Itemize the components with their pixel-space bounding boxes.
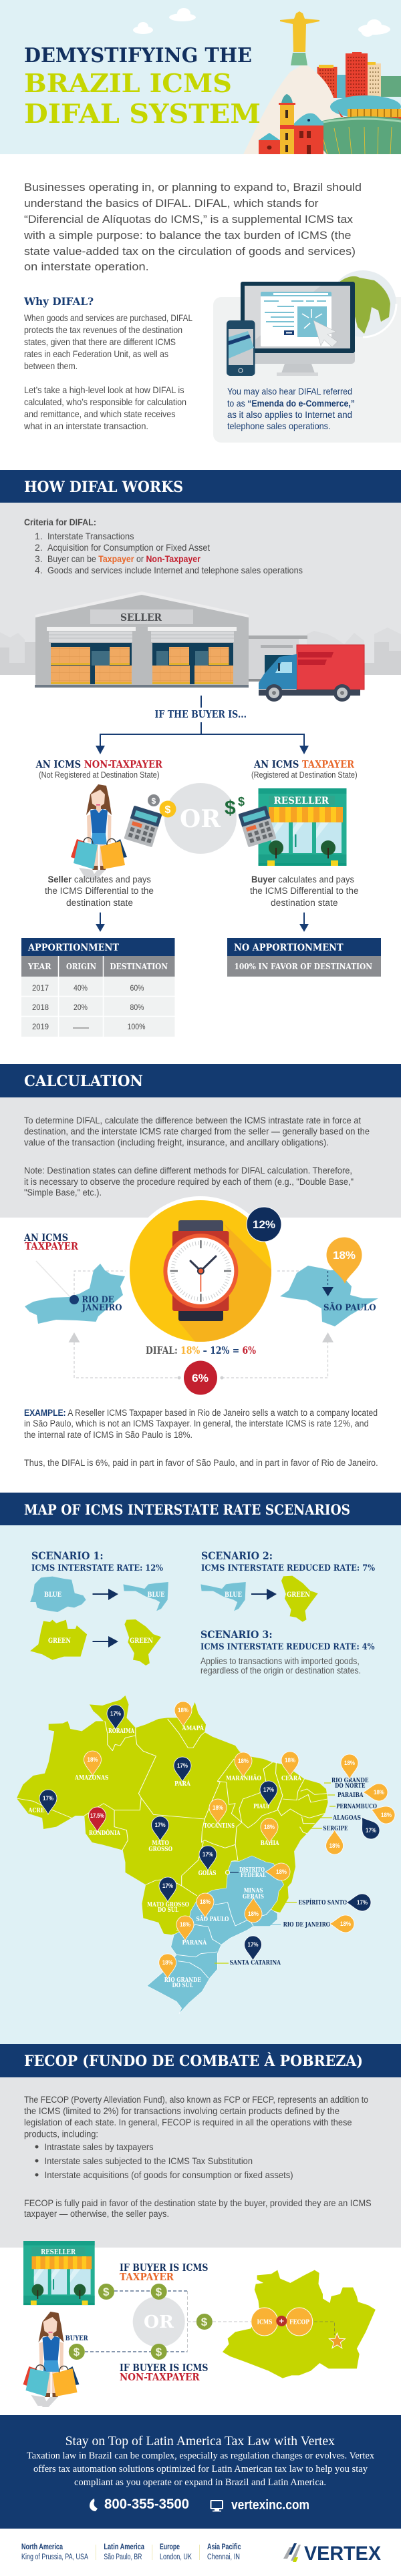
scenario 1: [30, 1549, 168, 1665]
text: callout note: [227, 386, 355, 431]
rate values: 18%: [374, 1789, 384, 1796]
text: criteria list: Criteria for DIFAL:: [24, 517, 96, 527]
rate values: 17%: [247, 1941, 259, 1949]
icon: reseller store and calculator: RESELLER: [274, 796, 329, 806]
text: criteria list: Goods and services include Internet and telephone sales operations: [47, 565, 303, 575]
intro paragraph: “Diferencial de Alíquotas do ICMS,” is a supplemental ICMS tax: [24, 213, 354, 226]
heading: ICMS taxpayer: (Registered at Destination State): [251, 770, 358, 780]
icon: calculator and coins: $: [151, 796, 156, 806]
list: FECOP operations: Interstate acquisitions (of goods for consumption or fixed assets): [45, 2170, 293, 2180]
heading: ICMS non-taxpayer: (Not Registered at Destination State): [39, 770, 159, 780]
text: who pays FECOP: FECOP is fully paid in favor of the destination state by the buyer, provided they are an ICMS: [24, 2198, 372, 2208]
label: ICMS taxpayer origin: TAXPAYER: [25, 1240, 78, 1252]
text: why DIFAL body: Let’s take a high-level look at how DIFAL is: [24, 385, 184, 395]
scenario 1: ICMS INTERSTATE RATE: 12%: [31, 1563, 164, 1573]
state labels on map: PARÁ: [174, 1780, 191, 1788]
state labels on map: MATO GROSSO: [147, 1901, 189, 1908]
table: apportionment: 20%: [74, 1003, 88, 1012]
rate values: 18%: [180, 1921, 190, 1928]
text: example: the internal rate of ICMS in São Paulo is 18%.: [24, 1430, 192, 1440]
table: no apportionment: [227, 938, 381, 977]
icon: smartphone with card: [227, 320, 255, 376]
rate values: 18%: [87, 1756, 98, 1764]
text: FECOP description: the ICMS (limited to 2%) for transactions involving certain products defined by the: [24, 2106, 340, 2116]
icon: buyer woman small: BUYER: [65, 2335, 88, 2342]
intro paragraph: understand the basics of DIFAL. DIFAL, which stands for: [24, 197, 319, 210]
illustration: warehouse: [35, 591, 249, 688]
table: apportionment: DESTINATION: [110, 962, 168, 971]
icon: watch product: [130, 1196, 271, 1342]
text: why DIFAL body: between them.: [24, 361, 78, 371]
text: seller pays: the ICMS Differential to the: [45, 886, 154, 896]
table: apportionment: 80%: [130, 1003, 144, 1012]
state labels on map: ACRE: [28, 1807, 44, 1814]
map: destination state: [223, 2270, 376, 2378]
table: no apportionment: NO APPORTIONMENT: [234, 943, 344, 953]
rate values: 17%: [155, 1822, 166, 1829]
state labels on map: DISTRITO: [239, 1866, 265, 1874]
text: FECOP description: [24, 2095, 368, 2139]
section: map of ICMS interstate rate scenarios: [0, 1493, 401, 2044]
icon: São Paulo state: [280, 1266, 378, 1326]
scenario 3: Applies to transactions with imported goods,: [200, 1656, 360, 1666]
table: no apportionment: 100% IN FAVOR OF DESTINATION: [234, 962, 372, 971]
text: CTA body: compliant as you operate or expand in Brazil and Latin America.: [74, 2477, 326, 2488]
badge: 12%: [247, 1207, 281, 1242]
heading: how DIFAL works: HOW DIFAL WORKS: [24, 479, 183, 496]
state labels off map: DO NORTE: [335, 1782, 365, 1790]
scenario 1: GREEN: [48, 1637, 71, 1645]
text: website: vertexinc.com: [231, 2498, 309, 2513]
intro paragraph: on interstate operation.: [24, 260, 149, 273]
list: FECOP operations: Interstate sales subjected to the ICMS Tax Substitution: [45, 2156, 253, 2166]
table: apportionment: 60%: [130, 983, 144, 993]
illustration: skyline background: [0, 627, 401, 675]
table: apportionment: 2019: [32, 1022, 49, 1031]
text: buyer pays: [250, 874, 358, 908]
text: phone number: 800-355-3500: [104, 2497, 189, 2512]
text: FECOP description: The FECOP (Poverty Alleviation Fund), also known as FCP or FECP, represents an addition to: [24, 2095, 368, 2105]
text: example: in São Paulo, which is not an ICMS Taxpayer. In general, the interstate ICMS is rate 12%, and: [24, 1419, 369, 1429]
illustration: Rio skyline: [243, 11, 401, 154]
section: How DIFAL works: [0, 470, 401, 675]
text: criteria list: Interstate Transactions: [47, 531, 134, 541]
text: how to determine DIFAL: value of the transaction (including freight, insurance, and ancillary obligations).: [24, 1137, 329, 1147]
intro paragraph: with a simple purpose: to balance the tax burden of ICMS (the: [23, 229, 352, 242]
text: why DIFAL body: rates in each Federation Unit, as well as: [24, 349, 168, 359]
text: decision label: IF THE BUYER IS...: [155, 708, 247, 720]
heading: if taxpayer: [120, 2262, 209, 2283]
text: how to determine DIFAL: destination, and the interstate ICMS rate charged from the seller — generally based on the: [24, 1127, 370, 1136]
text: why DIFAL body: protects the tax revenues of the destination: [24, 325, 182, 335]
text: callout note: telephone sales operations.: [227, 421, 330, 431]
heading: ICMS taxpayer: [251, 758, 358, 780]
logo: Vertex: VERTEX: [304, 2543, 381, 2565]
state labels on map: [28, 1724, 301, 1989]
state labels on map: TOCANTINS: [204, 1822, 235, 1830]
label: Rio de Janeiro: JANEIRO: [82, 1303, 122, 1313]
gray arrows: [68, 1332, 333, 1342]
text: CTA body: [27, 2451, 374, 2488]
text: callout note: as it also applies to Internet and: [227, 409, 352, 420]
scenario 3: regardless of the origin or destination states.: [200, 1665, 361, 1676]
arrows to tables: [96, 913, 309, 932]
heading: CTA: Stay on Top of Latin America Tax Law with Vertex: [65, 2434, 335, 2449]
list: FECOP operations: [35, 2142, 293, 2180]
rate pin: 17.5% red: [88, 1807, 106, 1832]
icon: plus: [276, 2316, 287, 2326]
text: criteria list: Acquisition for Consumption or Fixed Asset: [47, 542, 210, 553]
label: seller: SELLER: [120, 611, 162, 623]
state labels off map: PERNAMBUCO: [336, 1803, 377, 1810]
icon: OR circle: [164, 783, 237, 854]
text: how to determine DIFAL: [24, 1115, 370, 1198]
text: why DIFAL body: states, given that there are different ICMS: [24, 337, 176, 347]
formula: DIFAL: DIFAL: 18% – 12% = 6%: [146, 1344, 256, 1356]
state labels off map: SANTA CATARINA: [230, 1959, 281, 1967]
state labels off map: ESPÍRITO SANTO: [299, 1898, 347, 1906]
text: seller pays: destination state: [66, 898, 133, 908]
scenario 2: GREEN: [287, 1591, 310, 1599]
text: how to determine DIFAL: To determine DIFAL, calculate the difference between the ICMS intrastate rate in force at: [24, 1115, 361, 1125]
footer: office locations: Chennai, IN: [207, 2553, 240, 2561]
icon: reseller store and calculator: $: [238, 795, 245, 808]
state labels on map: RORAIMA: [108, 1728, 134, 1735]
state labels off map: PARAIBA: [338, 1792, 364, 1799]
text: CTA body: Taxation law in Brazil can be complex, especially as regulation changes or evolves. Vertex: [27, 2451, 374, 2461]
state labels off map: ALAGOAS: [332, 1814, 361, 1822]
text: criteria list: 4.: [35, 565, 43, 575]
table: apportionment: APPORTIONMENT: [27, 943, 120, 953]
state labels on map: MARANHÃO: [226, 1774, 261, 1782]
heading: ICMS taxpayer: AN ICMS TAXPAYER: [253, 758, 354, 770]
icon: FECOP oval: [286, 2308, 313, 2336]
text: buyer pays: Buyer calculates and pays: [251, 874, 354, 884]
rate values: 17%: [110, 1710, 121, 1718]
text: how to determine DIFAL: it is necessary to observe the procedure required by each of them (e.g., "Double Base,": [24, 1177, 354, 1187]
text: CTA body: offers tax automation solutions optimized for Latin American tax law to help you stay: [33, 2464, 368, 2475]
state labels on map: RIO GRANDE: [164, 1977, 201, 1984]
state labels off map: SERGIPE: [323, 1825, 348, 1832]
header banner: [0, 0, 401, 154]
state labels off map: [230, 1777, 377, 1967]
label: ICMS taxpayer origin: [23, 1232, 78, 1252]
icon: Rio de Janeiro state: [25, 1261, 125, 1324]
state labels on map: GOIÁS: [198, 1869, 217, 1877]
badge: 6%: [178, 1360, 223, 1395]
text: why DIFAL body: [23, 313, 192, 431]
rate values: 18%: [162, 1959, 173, 1967]
diagram flow lines: [74, 1271, 328, 1378]
footer: call to action: [0, 2415, 401, 2529]
heading: if non-taxpayer: [120, 2362, 209, 2383]
rate values: 18%: [340, 1920, 351, 1928]
section: FECOP: [0, 2044, 401, 2248]
rate values: 17%: [203, 1851, 213, 1858]
intro paragraph: Businesses operating in, or planning to expand to, Brazil should: [24, 181, 362, 194]
text: why DIFAL body: and remittance, and which state receives: [24, 409, 176, 419]
rate values: 18%: [248, 1910, 259, 1918]
badge: 18%: [326, 1238, 362, 1284]
icon: star: [329, 2333, 345, 2348]
heading: Why DIFAL: Why DIFAL?: [23, 295, 94, 308]
rate values: 17%: [366, 1827, 376, 1834]
icon: clouds: [133, 8, 390, 37]
footer: office locations: Latin America: [104, 2543, 144, 2551]
icon: buyer woman with bags: [71, 784, 127, 880]
map: Brazil states: [17, 1696, 398, 2014]
footer: office locations: [21, 2543, 241, 2561]
text: who pays FECOP: taxpayer — otherwise, the seller pays.: [24, 2209, 169, 2219]
section: calculation: [0, 1064, 401, 1218]
flowchart: if the buyer is: [96, 696, 309, 754]
text: criteria list: 1.: [35, 531, 43, 541]
rate values: 18%: [276, 1868, 287, 1876]
rate values: 17%: [43, 1795, 53, 1802]
footer: office locations: São Paulo, BR: [104, 2553, 142, 2561]
scenario 1: SCENARIO 1:: [31, 1549, 104, 1562]
badge: 12%: 12%: [253, 1218, 275, 1231]
icon: ICMS oval: [251, 2308, 278, 2336]
icon: monitor: [211, 2501, 223, 2511]
scenario 1: GREEN: [130, 1637, 153, 1645]
state labels on map: BAHIA: [261, 1840, 279, 1847]
state labels on map: CEARÁ: [281, 1774, 301, 1782]
leader lines: [215, 1783, 336, 1963]
table: apportionment: 2017: [32, 983, 49, 993]
state labels on map: PIAUÍ: [253, 1802, 269, 1810]
icon: OR circle: OR: [180, 805, 221, 833]
text: criteria list: 3.: [35, 553, 43, 564]
label: Rio de Janeiro: [82, 1295, 122, 1313]
rate values: 17%: [177, 1762, 188, 1770]
title: BRAZIL ICMS: [24, 68, 232, 98]
badge: 18%: 18%: [333, 1249, 356, 1262]
heading: calculation: CALCULATION: [24, 1073, 143, 1090]
scenario 2: BLUE: [225, 1591, 242, 1599]
state labels on map: RONDÔNIA: [89, 1829, 120, 1837]
rate values: 18%: [200, 1898, 211, 1906]
rate pins: 18% orange: [84, 1702, 398, 1979]
footer: office locations: Asia Pacific: [207, 2543, 241, 2551]
badge: 6%: 6%: [192, 1372, 209, 1384]
state labels on map: SÃO PAULO: [196, 1915, 229, 1923]
text: example: Thus, the DIFAL is 6%, paid in part in favor of São Paulo, and in part in favor of Rio de Janeiro.: [24, 1458, 378, 1468]
table: apportionment: ORIGIN: [66, 962, 96, 971]
scenario 3: [200, 1628, 375, 1676]
icon: OR circle small: OR: [144, 2312, 174, 2332]
scenario 2: [200, 1549, 376, 1622]
state labels on map: AMAZONAS: [74, 1774, 109, 1782]
state labels off map: RIO DE JANEIRO: [283, 1921, 330, 1928]
icon: calculator and coins: [124, 794, 176, 847]
title: DEMYSTIFYING THE: [24, 44, 252, 67]
intro paragraph: [23, 181, 362, 273]
table: apportionment: 2018: [32, 1003, 49, 1012]
footer: office locations: North America: [21, 2543, 63, 2551]
text: how to determine DIFAL: "Simple Base," etc.).: [24, 1188, 102, 1198]
icon: buyer woman small: [23, 2312, 88, 2407]
scenario 3: SCENARIO 3:: [200, 1628, 273, 1641]
text: criteria list: 2.: [35, 542, 43, 553]
icon: OR circle small: [133, 2296, 185, 2347]
heading: if non-taxpayer: NON-TAXPAYER: [120, 2371, 200, 2383]
label: ICMS taxpayer origin: AN ICMS: [23, 1232, 68, 1244]
icon: reseller store small: RESELLER: [41, 2248, 76, 2256]
icon: FECOP oval: FECOP: [289, 2319, 309, 2326]
scenario 2: ICMS INTERSTATE REDUCED RATE: 7%: [201, 1563, 376, 1573]
text: how to determine DIFAL: Note: Destination states can define different methods for DIFAL calculation. Therefore,: [24, 1166, 352, 1176]
footer: office locations: Europe: [160, 2543, 180, 2551]
text: seller pays: Seller calculates and pays: [48, 874, 151, 884]
text: why DIFAL body: When goods and services are purchased, DIFAL: [24, 313, 192, 323]
scenario 3: ICMS INTERSTATE REDUCED RATE: 4%: [200, 1642, 375, 1652]
intro paragraph: state value-added tax on the circulation of goods and services): [24, 245, 356, 258]
text: why DIFAL body: calculated, who’s responsible for calculation: [24, 397, 186, 407]
icon: reseller store and calculator: $: [225, 797, 236, 819]
text: example: [24, 1408, 378, 1468]
label: Rio de Janeiro: RIO DE: [82, 1295, 114, 1305]
icon: reseller store and calculator: [225, 788, 346, 866]
state labels on map: FEDERAL: [241, 1872, 266, 1879]
text: buyer pays: destination state: [271, 898, 338, 908]
heading: ICMS non-taxpayer: [35, 758, 162, 780]
heading: FECOP: FECOP (FUNDO DE COMBATE À POBREZA): [24, 2052, 363, 2070]
icon: phone: [90, 2499, 98, 2511]
table: apportionment: 40%: [74, 983, 88, 993]
title: [24, 44, 261, 130]
footer: office locations: London, UK: [160, 2553, 192, 2561]
state labels on map: PARANÁ: [182, 1939, 207, 1947]
icon: ICMS oval: ICMS: [257, 2319, 273, 2326]
rate values: 17%: [357, 1899, 368, 1906]
icon: money coins: [69, 2284, 213, 2360]
icon: globe: [329, 270, 396, 337]
scenario 1: BLUE: [147, 1591, 165, 1599]
text: criteria list: Buyer can be Taxpayer or Non-Taxpayer: [47, 553, 200, 564]
label: São Paulo: SÃO PAULO: [323, 1302, 376, 1313]
illustration: loading dock: [249, 635, 307, 682]
state labels on map: MINAS: [244, 1887, 263, 1894]
heading: ICMS non-taxpayer: AN ICMS NON-TAXPAYER: [35, 758, 162, 770]
rate pins: 17% navy: [39, 1705, 383, 1961]
text: why DIFAL body: what in an interstate transaction.: [23, 421, 148, 431]
icon: delivery truck: [259, 645, 364, 702]
title: DIFAL SYSTEM: [24, 99, 261, 130]
panel: e-commerce callout: [213, 270, 401, 443]
icon: desktop monitor: [241, 282, 355, 376]
text: buyer pays: the ICMS Differential to the: [250, 886, 358, 896]
rate values: 18%: [213, 1804, 223, 1812]
state labels on map: DO SUL: [158, 1906, 178, 1914]
state labels on map: DO SUL: [172, 1982, 193, 1989]
footer: office locations: King of Prussia, PA, USA: [21, 2553, 88, 2561]
icon: reseller store small: [23, 2241, 95, 2305]
rate values: 17%: [162, 1882, 173, 1890]
scenario 1: BLUE: [44, 1591, 61, 1599]
heading: if taxpayer: TAXPAYER: [120, 2271, 174, 2283]
rate values: 18%: [178, 1707, 188, 1714]
heading: if taxpayer: IF BUYER IS ICMS: [120, 2262, 209, 2274]
heading: if non-taxpayer: IF BUYER IS ICMS: [120, 2362, 209, 2374]
text: FECOP description: products, including:: [24, 2129, 98, 2139]
flow: payment lines: [85, 2291, 251, 2352]
table: apportionment: YEAR: [27, 962, 51, 971]
text: FECOP description: legislation of each state. In general, FECOP is required in all the operations with these: [24, 2117, 352, 2127]
list: FECOP operations: Intrastate sales by taxpayers: [45, 2142, 154, 2152]
rate values: 18%: [329, 1842, 340, 1850]
icon: calculator and coins: $: [164, 804, 171, 816]
state labels on map: GROSSO: [148, 1846, 172, 1853]
text: seller pays: [45, 874, 154, 908]
state labels on map: MATO: [152, 1840, 169, 1847]
rate values: 18%: [238, 1758, 249, 1765]
text: criteria list: [24, 517, 303, 575]
rate values: [43, 1707, 392, 1967]
state labels off map: RIO GRANDE: [331, 1777, 369, 1784]
scenario 2: SCENARIO 2:: [201, 1549, 273, 1562]
text: callout note: You may also hear DIFAL referred: [227, 386, 352, 397]
table: apportionment: 100%: [127, 1022, 146, 1031]
state labels on map: GERAIS: [243, 1893, 264, 1900]
text: callout note: to as “Emenda do e-Commerce,”: [227, 398, 355, 409]
rate values: 18%: [264, 1824, 275, 1831]
rate values: 17%: [263, 1786, 274, 1794]
icon: Distrito Federal marker: [226, 1870, 230, 1874]
rate values: 18%: [381, 1812, 392, 1819]
rate values: 18%: [285, 1757, 295, 1764]
rate values: 18%: [344, 1760, 355, 1767]
text: who pays FECOP: [24, 2198, 372, 2219]
rate values: 17.5%: [90, 1812, 104, 1820]
state labels on map: AMAPÁ: [182, 1724, 205, 1732]
heading: map: MAP OF ICMS INTERSTATE RATE SCENARIOS: [24, 1501, 350, 1518]
table: apportionment: [21, 938, 175, 1037]
